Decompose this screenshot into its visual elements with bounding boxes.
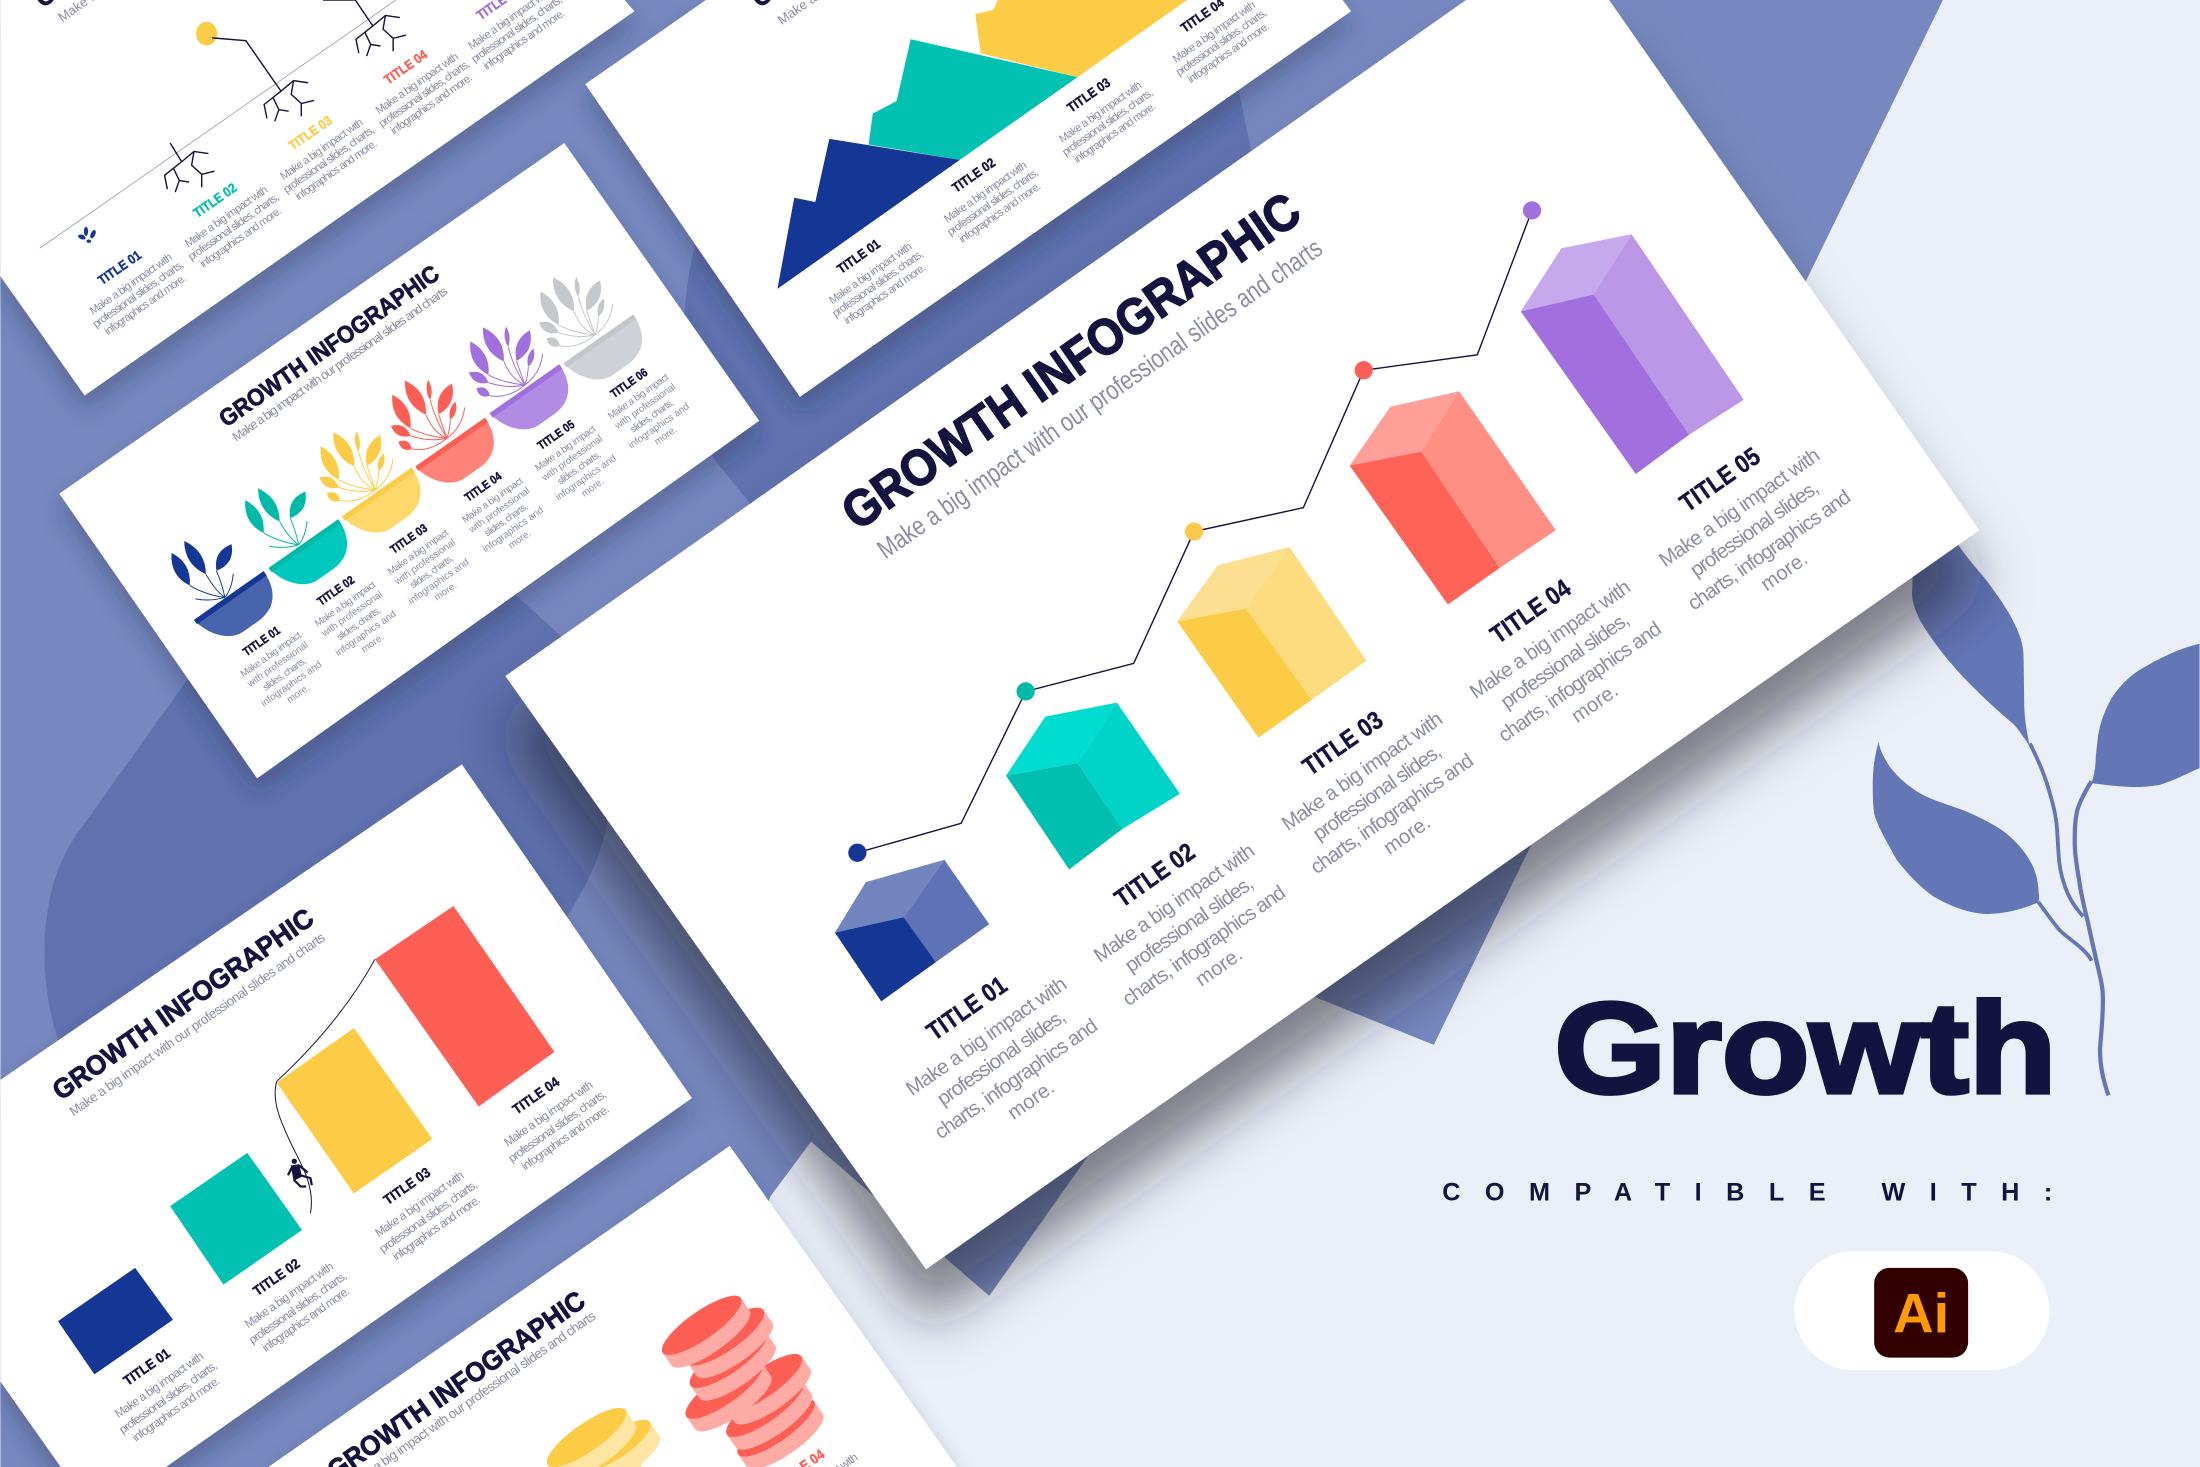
text block: title 02: more.: [1192, 943, 1247, 991]
text block: title 06: [595, 357, 699, 462]
text block: title 04: more.: [507, 528, 533, 551]
text block: title 01: TITLE 01: [120, 1345, 173, 1389]
text block: title 03: Make a big impact with: [278, 117, 366, 183]
text block: title 01: more.: [1004, 1077, 1059, 1124]
main subtitle: Make a big impact with our professional slides and charts: [872, 233, 1328, 565]
text block: title 02: slides, charts,: [335, 605, 383, 643]
text block: title 01: Make a big impact: [239, 630, 304, 680]
text block: title 05: TITLE 05: [535, 417, 577, 453]
text block: title 05: infographics and: [554, 453, 619, 503]
text block: title 05: more.: [580, 476, 606, 500]
coin stack: yellow: [540, 1399, 667, 1467]
text block: title 02: charts, infographics and: [1119, 882, 1290, 1011]
text block: title 02: Make a big impact with: [942, 159, 1029, 225]
text block: title 02: professional slides, charts,: [945, 167, 1041, 239]
text block: title 06: with professional: [612, 382, 678, 432]
marker 04: [1355, 361, 1373, 379]
text block: title 01: TITLE 01: [922, 971, 1012, 1046]
text block: title 06: more.: [653, 424, 679, 448]
mountain: teal: [869, 39, 1078, 160]
cube 02: [1006, 703, 1180, 870]
slide heading: GROWTH INFOGRAPHIC: [46, 902, 319, 1106]
text block: title 04: with professional: [466, 485, 532, 536]
text block: title 05: more.: [1757, 548, 1812, 596]
text block: title 01: infographics and more.: [842, 262, 928, 327]
text block: title 03: [375, 512, 478, 617]
text block: title 01: TITLE 01: [95, 247, 144, 288]
text block: title 04: professional slides, charts,: [506, 1087, 609, 1165]
text block: title 02: TITLE 02: [315, 573, 357, 608]
text block: title 01: professional slides,: [933, 1006, 1070, 1110]
text block: title 05: infographics and more.: [481, 7, 567, 73]
text block: title 01: infographics and: [259, 659, 324, 709]
text block: title 03: [354, 1146, 488, 1267]
text block: title 01: infographics and more.: [130, 1373, 223, 1444]
coin stack: red: [655, 1287, 831, 1467]
panel: plants in bowls slide: [59, 143, 759, 778]
text block: title 03: TITLE 03: [380, 1164, 433, 1208]
text block: title 02: professional slides, charts,: [246, 1269, 349, 1347]
text block: title 05: with professional: [539, 434, 605, 484]
text block: title 03: professional slides, charts,: [1060, 87, 1156, 159]
text block: title 03: Make a big impact: [386, 527, 451, 578]
icon: Adobe Illustrator: [1874, 1268, 1968, 1358]
text block: title 03: [1256, 677, 1493, 900]
text block: title 04: more.: [1568, 680, 1623, 728]
panel: top slide with mountains: [585, 0, 1351, 397]
text block: title 03: infographics and more.: [293, 138, 380, 203]
text block: title 02: Make a big impact: [313, 579, 378, 630]
marker 05: [1523, 201, 1541, 219]
text block: title 01: [71, 231, 193, 341]
text block: title 01: Make a big impact with: [902, 973, 1071, 1101]
panel: main growth slide: [505, 0, 1979, 1269]
text block: title 05: [1633, 413, 1870, 636]
text block: title 03: with professional: [392, 537, 458, 588]
text block: title 01: more.: [285, 682, 312, 706]
mountain: blue: [777, 139, 960, 289]
text block: title 02: Make a big impact with: [1090, 840, 1259, 967]
icon: sprout: [77, 227, 97, 243]
text block: title 03: TITLE 03: [1298, 706, 1388, 781]
text block: title 04: [1154, 0, 1276, 89]
text block: title 05: slides, charts,: [556, 449, 603, 487]
text block: title 01: TITLE 01: [834, 236, 883, 277]
title: Growth: Growth: [1554, 977, 2056, 1121]
rope: [275, 959, 375, 1213]
text block: title 05: Make a big impact with: [1655, 444, 1824, 572]
text block: title 05: [522, 409, 626, 513]
text block: title 04: Make a big impact with: [374, 51, 461, 117]
text block: title 03: more.: [1380, 812, 1435, 859]
text block: title 04: TITLE 04: [1485, 574, 1576, 649]
text block: title 06: infographics and: [627, 401, 692, 451]
text block: title 04: TITLE 04: [462, 469, 505, 505]
text block: title 03: infographics and more.: [390, 1193, 483, 1264]
text block: title 02: more.: [359, 632, 386, 655]
text block: title 01: charts, infographics and: [931, 1015, 1102, 1144]
text block: title 04: Make a big impact with: [1171, 0, 1258, 66]
text block: title 02: TITLE 02: [190, 180, 239, 221]
text block: title 04 fragment: [753, 1431, 861, 1467]
text block: title 04: charts, infographics and: [1495, 618, 1666, 747]
marker 01: [848, 844, 866, 862]
label: compatible with: COMPATIBLE WITH:: [1442, 1179, 2052, 1207]
text block: title 03: [1040, 58, 1163, 169]
mountain: red: [1149, 0, 1187, 10]
text block: title 01: professional slides, charts,: [116, 1358, 220, 1437]
ground line: [40, 0, 396, 248]
cube 04: [1350, 391, 1556, 604]
text block: title 03: TITLE 03: [1064, 75, 1113, 115]
cube 05: [1521, 234, 1744, 474]
text block: title 01: infographics and more.: [103, 272, 189, 338]
text block: title 02: [224, 1237, 358, 1358]
text block: title 02: TITLE 02: [949, 155, 998, 195]
text block: title 05: professional slides,: [1686, 477, 1823, 582]
growth line: [857, 210, 1532, 853]
text block: title 01: professional slides, charts,: [830, 248, 926, 320]
slide subtitle: Make a big impact with our professional slides and charts: [66, 929, 328, 1119]
text block: title 01: [227, 615, 331, 720]
text block: title 04: Make a big impact: [460, 476, 525, 526]
slide subtitle: Make a big impact with our professional slides and charts: [230, 284, 450, 444]
text block: title 04: infographics and more.: [1186, 21, 1272, 86]
text block: title 03: Make a big impact with: [1057, 79, 1144, 146]
text block: title 06: Make a big impact: [606, 372, 671, 422]
icon: Adobe Illustrator: Ai: [1893, 1281, 1949, 1344]
text block: title 02: infographics and more.: [198, 205, 284, 270]
text block: title 02: infographics and: [334, 609, 398, 659]
text block: title 04: infographics and more.: [519, 1102, 612, 1173]
text block: title 02: Make a big impact with: [183, 184, 270, 250]
text block: title 01: [94, 1327, 228, 1448]
text block: title 01: Make a big impact with: [827, 241, 914, 307]
text block: title 02: [925, 138, 1048, 249]
text block: title 01: TITLE 01: [240, 623, 283, 659]
text block: title 03: Make a big impact with: [1278, 708, 1447, 835]
icon: climber: [288, 1159, 312, 1187]
text block: title 05: TITLE 05: [1675, 442, 1766, 518]
text block: title 01: slides, charts,: [261, 656, 309, 693]
text block: title 02: Make a big impact with: [242, 1259, 336, 1331]
text block: title 01: Make a big impact with: [88, 251, 175, 317]
text block: title 02: [166, 163, 289, 274]
marker 03: [1185, 522, 1203, 541]
text block: title 06: slides, charts,: [628, 397, 676, 435]
text block: title 03: professional slides, charts,: [282, 124, 377, 196]
text block: title 05: charts, infographics and: [1684, 486, 1855, 615]
bar: yellow: [277, 1028, 432, 1194]
text block: title 04: professional slides,: [1497, 609, 1634, 714]
compatibility pill: [1794, 1251, 2049, 1370]
background: dark blob left: [45, 351, 625, 1122]
slide heading: GROWTH INFOGRAPHIC: [214, 260, 445, 433]
text block: title 01: Make a big impact with: [112, 1349, 206, 1421]
yellow milestone dot and branch: [196, 22, 281, 91]
text block: title 03: infographics and: [406, 557, 471, 607]
text block: title 05: [450, 0, 572, 76]
text block: title 04: professional slides, charts,: [1174, 7, 1269, 79]
bowl 02: [269, 519, 360, 599]
text block: title 03: charts, infographics and: [1307, 750, 1478, 879]
text block: title 02: infographics and more.: [259, 1284, 352, 1355]
text block: title 03: infographics and more.: [1072, 100, 1158, 166]
text block: title 01: professional slides, charts,: [91, 259, 186, 331]
plants: [171, 277, 613, 600]
text block: title 02: TITLE 02: [1110, 838, 1200, 913]
text block: title 04: Make a big impact with: [501, 1078, 595, 1149]
text block: title 04: [449, 460, 553, 565]
text block: title 02: with professional: [319, 589, 385, 640]
text block: title 02: infographics and more.: [957, 180, 1043, 246]
text block: title 06: TITLE 06: [608, 365, 650, 401]
text block: title 01: with professional: [245, 640, 310, 690]
text block: title 03: slides, charts,: [408, 553, 456, 591]
text block: title 01: [880, 942, 1117, 1165]
text block: title 03: TITLE 03: [286, 113, 335, 153]
text block: title 04: professional slides, charts,: [377, 58, 472, 130]
text block: title 05: Make a big impact: [533, 424, 598, 474]
text block: title 03: [262, 96, 384, 206]
bar: blue: [58, 1268, 173, 1374]
panel: climber bars slide: [0, 764, 692, 1467]
text block: title 04: TITLE 04: [381, 47, 430, 87]
bowl 06: [564, 314, 655, 394]
bowl 05: [490, 364, 581, 444]
cube 03: [1177, 547, 1366, 738]
text block: title 02: professional slides, charts,: [186, 192, 281, 263]
cube 01: [835, 860, 989, 1001]
text block: title 03: TITLE 03: [387, 521, 430, 557]
mountain: yellow: [975, 0, 1187, 77]
text block: title 02: professional slides,: [1121, 872, 1258, 977]
tree stages: [165, 0, 406, 192]
text block: title 03: professional slides, charts,: [377, 1177, 480, 1256]
text block: title 03: more.: [432, 580, 459, 603]
text block: title 04: [483, 1055, 617, 1177]
text block: title 04: Make a big impact with: [1466, 576, 1635, 704]
text block: title 02: [1068, 809, 1305, 1032]
marker 02: [1017, 682, 1035, 701]
panel: top-left slide with growing tree: [0, 0, 634, 396]
text block: title 01: [810, 219, 933, 330]
text block: title 03: Make a big impact with: [372, 1168, 466, 1240]
plant decoration: [1873, 545, 2200, 1095]
bowl 03: [342, 468, 433, 547]
text block: title 03: professional slides,: [1309, 741, 1446, 845]
text block: title 02: TITLE 02: [250, 1255, 303, 1299]
panel: coin stacks slide: [268, 1146, 957, 1467]
bar: red: [375, 906, 554, 1107]
main heading: GROWTH INFOGRAPHIC: [831, 181, 1311, 541]
bowl 01: [194, 571, 285, 651]
bar: teal: [170, 1153, 302, 1285]
text block: title 02: [302, 564, 405, 669]
text block: title 04: slides, charts,: [483, 501, 530, 539]
text block: title 04: TITLE 04: [509, 1073, 562, 1117]
text block: title 04: [357, 30, 479, 140]
text block: title 04: [1444, 545, 1681, 768]
text block: title 04: infographics and more.: [389, 72, 475, 137]
background: dark blob top: [684, 28, 1270, 617]
bowl 04: [415, 418, 507, 497]
text block: title 04: infographics and: [481, 505, 546, 555]
